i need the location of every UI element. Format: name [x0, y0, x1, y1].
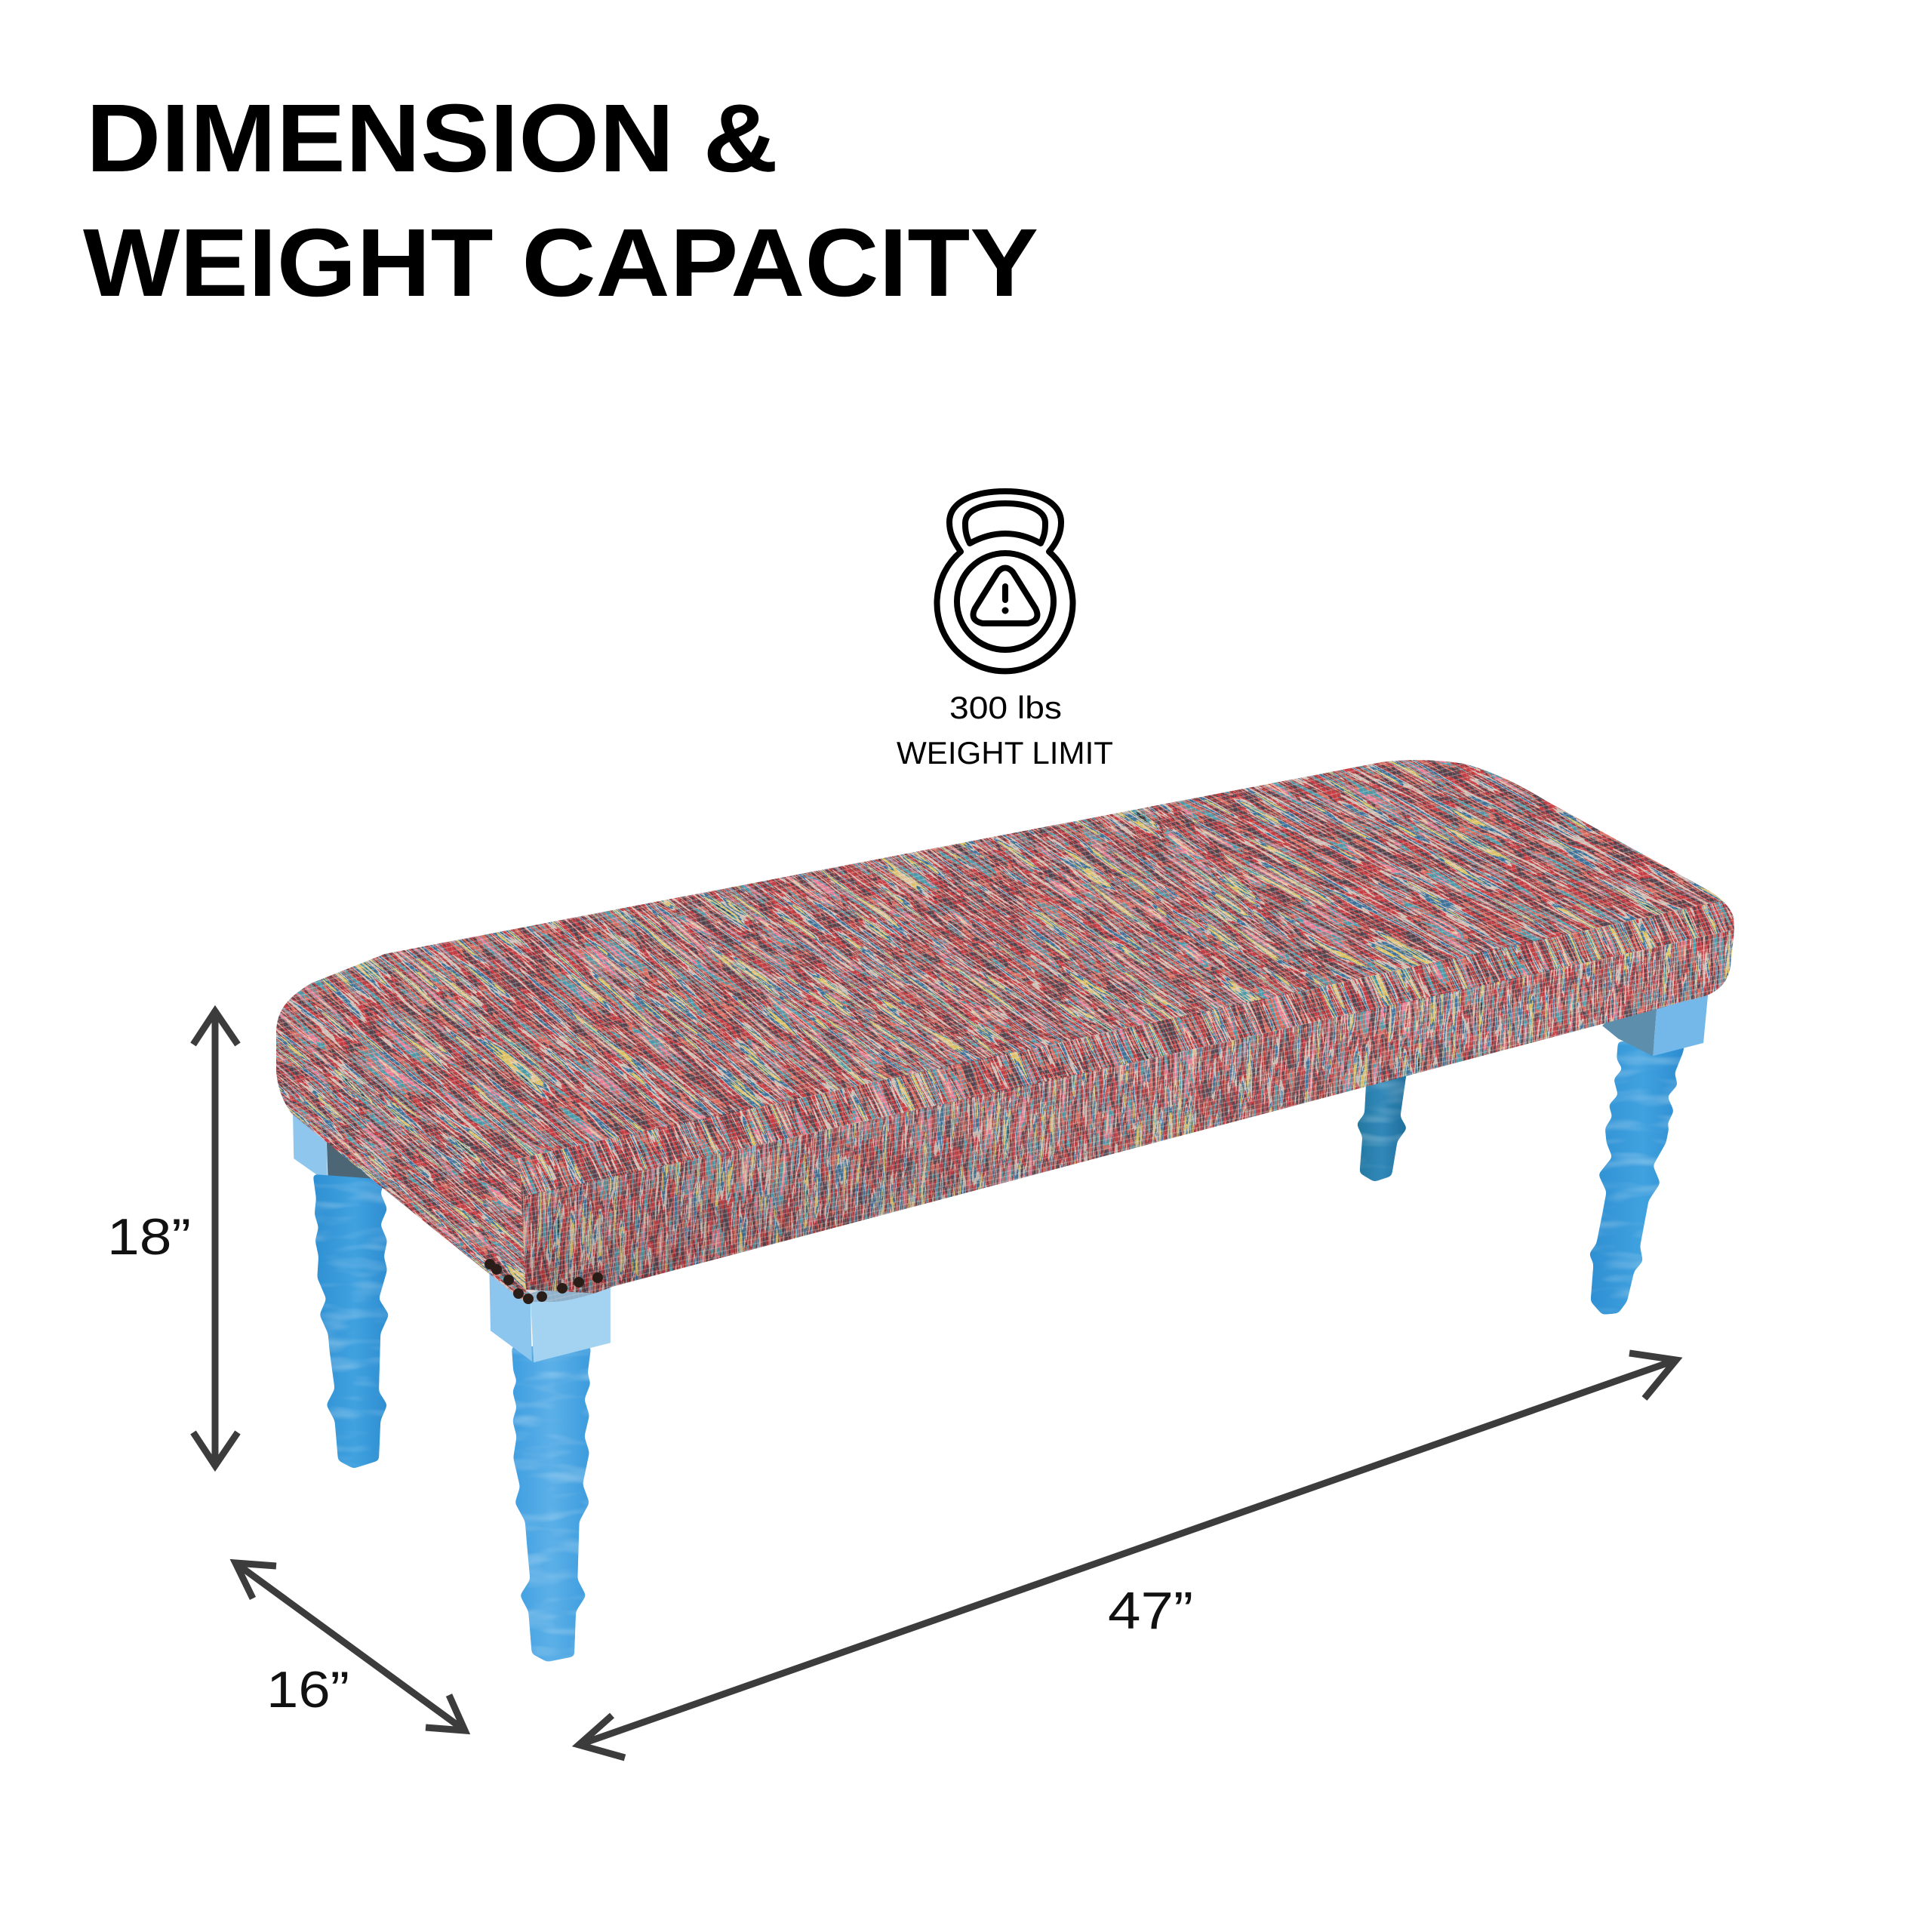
weight limit label: 300 lbs: [949, 690, 1062, 725]
icon: kettlebell weight with warning triangle: [937, 491, 1073, 671]
bench: [192, 760, 1734, 1757]
front right leg block: [1602, 991, 1709, 1056]
upholstery nails: [485, 1259, 603, 1304]
title: DIMENSION &: [86, 85, 778, 192]
seat: top face: [276, 760, 1734, 1177]
back right leg: [1357, 1070, 1407, 1182]
title: WEIGHT CAPACITY: [83, 209, 1038, 317]
seat: rounded fold between top and front: [517, 901, 1734, 1196]
weight limit label: [897, 690, 1113, 771]
weight limit label: WEIGHT LIMIT: [897, 735, 1113, 771]
arrow: width: [579, 1353, 1676, 1758]
label: width 47 inches: 47”: [1108, 1581, 1193, 1640]
title: [83, 85, 1038, 317]
seat: front face: [520, 922, 1734, 1302]
seat: left side face: [276, 1034, 527, 1304]
label: height 18 inches: 18”: [107, 1208, 191, 1266]
arrow: depth: [235, 1563, 465, 1730]
arrow: height: [193, 1010, 238, 1467]
front left leg block: [489, 1262, 611, 1362]
front right leg: [1589, 1041, 1684, 1315]
front left leg: [512, 1346, 591, 1662]
back left leg: [293, 1108, 386, 1185]
label: depth 16 inches: 16”: [266, 1661, 349, 1718]
